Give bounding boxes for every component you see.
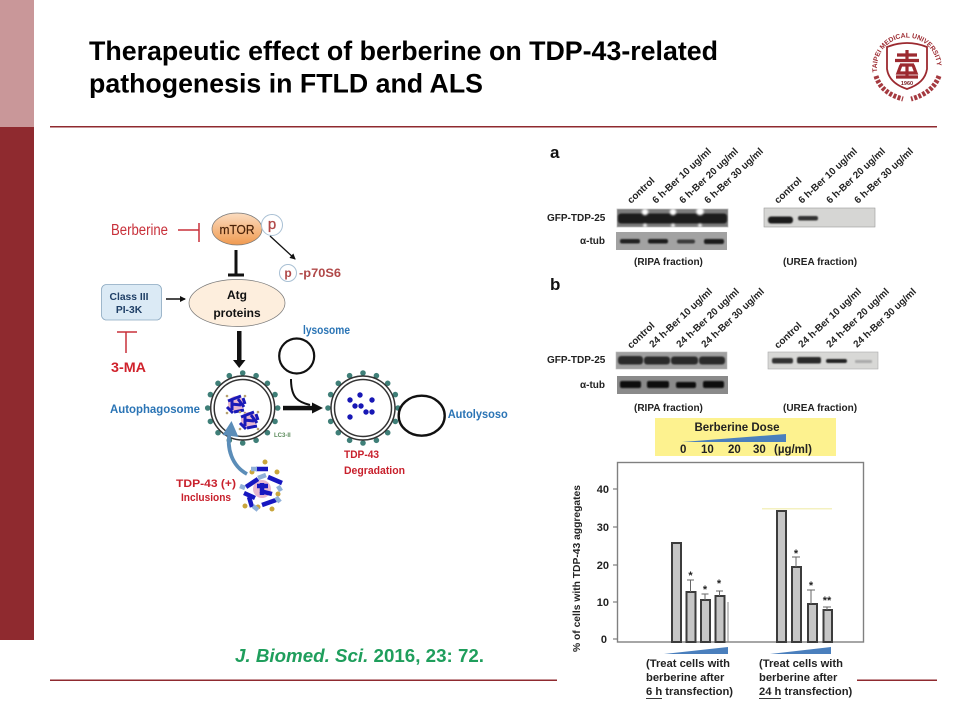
- node: Atg proteins: Atg: [227, 288, 247, 302]
- y axis title: % of cells with TDP-43 aggregates: [571, 485, 583, 652]
- diagram: autophagy pathway: [102, 213, 524, 512]
- node: mTOR: mTOR: [220, 222, 254, 237]
- label: TDP-43 Degradation: [344, 449, 405, 477]
- panel letter a: a: [550, 143, 560, 162]
- caption: 24 h treatment: [759, 658, 853, 699]
- label: p-p70S6: -p70S6: [299, 266, 341, 280]
- autophagosome vesicle: [205, 370, 280, 446]
- phospho marker on mTOR: p: [268, 216, 276, 233]
- label alpha-tub: α-tub: [580, 380, 605, 391]
- y axis ticks and labels: 10: [597, 597, 609, 609]
- arrow: Class III to Atg: [166, 298, 185, 300]
- blot: UREA GFP-TDP-25: [768, 352, 878, 369]
- label alpha-tub: α-tub: [580, 236, 605, 247]
- lysosome fused: [399, 396, 445, 436]
- legend: Berberine Dose: [655, 418, 836, 456]
- label: TDP-43 (+) Inclusions: Inclusions: [181, 492, 231, 504]
- y axis ticks and labels: 40: [597, 484, 609, 496]
- phospho marker on mTOR: [262, 214, 282, 236]
- legend: Berberine Dose: 20: [728, 444, 741, 456]
- arrow: mTOR to p70S6: [270, 236, 295, 259]
- y axis ticks and labels: [597, 484, 617, 646]
- error bars: 24 h group: [792, 557, 831, 610]
- significance stars: 24 h group: [794, 548, 832, 607]
- significance stars: 6 h group: *: [688, 570, 693, 582]
- label: Autolysosome (cropped): Autolysosome: [448, 407, 524, 421]
- lane labels: RIPA 24 h: 24 h-Ber 20 ug/ml: [675, 286, 742, 350]
- title: Therapeutic effect of berberine on TDP-43-related: [89, 36, 718, 66]
- significance stars: 6 h group: [688, 570, 722, 596]
- caption UREA: (UREA fraction): [783, 257, 857, 268]
- caption: 24 h treatment: (Treat cells with: [759, 658, 843, 670]
- label: p-p70S6: [280, 264, 341, 282]
- label: 3-MA: 3-MA: [111, 359, 146, 375]
- node: Class III PI-3K: PI-3K: [116, 305, 143, 316]
- lane labels: UREA 6 h: control: [773, 175, 805, 206]
- lane labels: UREA 24 h: control: [773, 320, 805, 351]
- legend: Berberine Dose: (µg/ml): [774, 444, 812, 456]
- bars: 24 h group: [777, 511, 832, 642]
- significance stars: 6 h group: *: [717, 578, 722, 590]
- blot: UREA GFP-TDP-25: [764, 208, 875, 227]
- TDP-43 inclusion cluster: [240, 460, 282, 512]
- title: [89, 36, 718, 98]
- label: TDP-43 (+) Inclusions: TDP-43 (+): [176, 478, 236, 490]
- y axis ticks and labels: 30: [597, 522, 609, 534]
- label: Berberine: Berberine: [111, 222, 168, 239]
- label: LC3-II: LC3-II: [274, 433, 291, 439]
- citation: J. Biomed. Sci. 2016, 23: 72.: [235, 645, 484, 666]
- caption UREA: (UREA fraction): [783, 403, 857, 414]
- caption: 6 h treatment: 6 h transfection): [646, 686, 733, 698]
- lane labels: RIPA 6 h: 6 h-Ber 30 ug/ml: [703, 146, 766, 206]
- panel: western blot a: [547, 143, 916, 268]
- lane labels: UREA 6 h: [773, 146, 916, 206]
- icon: Taipei Medical University seal: [872, 32, 942, 102]
- lane labels: RIPA 24 h: [626, 286, 767, 351]
- node: Class III PI-3K: [102, 284, 162, 320]
- caption: 6 h treatment: berberine after: [646, 672, 725, 684]
- lane labels: RIPA 24 h: control: [626, 320, 658, 351]
- lane labels: RIPA 6 h: control: [626, 175, 658, 206]
- lane labels: UREA 24 h: 24 h-Ber 20 ug/ml: [825, 286, 892, 350]
- legend: Berberine Dose: 30: [753, 444, 766, 456]
- left accent band: [0, 0, 34, 640]
- lane labels: UREA 6 h: 6 h-Ber 10 ug/ml: [797, 146, 860, 206]
- bars: 6 h group: [672, 543, 724, 642]
- lane labels: UREA 24 h: 24 h-Ber 30 ug/ml: [852, 286, 919, 350]
- chart frame: [618, 462, 864, 642]
- inhibition: 3-MA to Class III: [117, 332, 137, 353]
- arrow: autophagosome to autolysosome: [283, 402, 323, 414]
- node: mTOR: [212, 213, 262, 245]
- caption: 24 h treatment: 24 h transfection): [759, 686, 853, 698]
- blot: RIPA GFP-TDP-25: [616, 352, 727, 369]
- curved arrow: inclusions engulfed: [222, 421, 247, 474]
- lane labels: UREA 6 h: 6 h-Ber 20 ug/ml: [825, 146, 888, 206]
- lane labels: UREA 24 h: 24 h-Ber 10 ug/ml: [797, 286, 864, 350]
- blot: RIPA alpha-tub: [616, 232, 727, 250]
- lane labels: RIPA 24 h: 24 h-Ber 30 ug/ml: [700, 286, 767, 350]
- label: lysosome: lysosome: [303, 323, 350, 337]
- label: TDP-43 Degradation: TDP-43: [344, 449, 379, 461]
- panel: western blot b: [547, 275, 919, 414]
- legend: Berberine Dose: 0: [680, 444, 686, 456]
- caption: 6 h treatment: (Treat cells with: [646, 658, 730, 670]
- significance stars: 24 h group: *: [794, 548, 799, 560]
- significance stars: 24 h group: **: [823, 595, 832, 607]
- blot: RIPA GFP-TDP-25: [617, 208, 728, 227]
- legend: Berberine Dose: 10: [701, 444, 714, 456]
- legend: Berberine Dose: Berberine Dose: [694, 422, 780, 434]
- label GFP-TDP-25: GFP-TDP-25: [547, 355, 606, 366]
- bar chart: % of cells with TDP-43 aggregates: [571, 462, 864, 652]
- significance stars: 6 h group: *: [703, 584, 708, 596]
- lane labels: RIPA 6 h: [626, 146, 766, 206]
- node: Atg proteins: [189, 280, 285, 326]
- label: TDP-43 Degradation: Degradation: [344, 465, 405, 477]
- lysosome circle: [279, 338, 314, 374]
- y axis ticks and labels: 0: [601, 634, 607, 646]
- lane labels: RIPA 6 h: 6 h-Ber 10 ug/ml: [651, 146, 714, 206]
- caption RIPA: (RIPA fraction): [634, 403, 703, 414]
- lane labels: RIPA 6 h: 6 h-Ber 20 ug/ml: [678, 146, 741, 206]
- header rule: [50, 126, 937, 128]
- lane labels: RIPA 24 h: 24 h-Ber 10 ug/ml: [648, 286, 715, 350]
- reference line: [727, 602, 729, 642]
- panel letter b: b: [550, 275, 560, 294]
- inhibition: Berberine to mTOR: [178, 223, 199, 242]
- inhibition: mTOR to Atg proteins: [228, 250, 244, 275]
- label: TDP-43 (+) Inclusions: [176, 478, 236, 504]
- node: Atg proteins: proteins: [213, 306, 261, 320]
- node: Class III PI-3K: Class III: [110, 292, 149, 303]
- lane labels: UREA 24 h: [773, 286, 919, 351]
- caption RIPA: (RIPA fraction): [634, 257, 703, 268]
- title: pathogenesis in FTLD and ALS: [89, 68, 483, 98]
- lane labels: UREA 6 h: 6 h-Ber 30 ug/ml: [853, 146, 916, 206]
- dose wedges: [664, 647, 831, 654]
- blot: RIPA alpha-tub: [617, 376, 728, 394]
- white patch over footer rule: [557, 655, 857, 705]
- curved arrow: lysosome joins: [291, 379, 310, 405]
- faint highlight: [762, 508, 832, 510]
- icon: Taipei Medical University seal: TAIPEI MEDICAL UNIVERSITY: [872, 32, 942, 72]
- arrow: Atg to autophagosome: [233, 331, 246, 368]
- footer rule: [50, 680, 937, 681]
- icon: Taipei Medical University seal: 1960: [901, 81, 913, 87]
- error bars: 6 h group: [687, 580, 723, 600]
- label: p-p70S6: p: [284, 266, 292, 280]
- autolysosome vesicle: [325, 370, 401, 446]
- label: Autophagosome: Autophagosome: [110, 402, 200, 416]
- caption: 24 h treatment: berberine after: [759, 672, 838, 684]
- label GFP-TDP-25: GFP-TDP-25: [547, 213, 606, 224]
- y axis ticks and labels: 20: [597, 560, 609, 572]
- significance stars: 24 h group: *: [809, 580, 814, 592]
- caption: 6 h treatment: [646, 658, 733, 699]
